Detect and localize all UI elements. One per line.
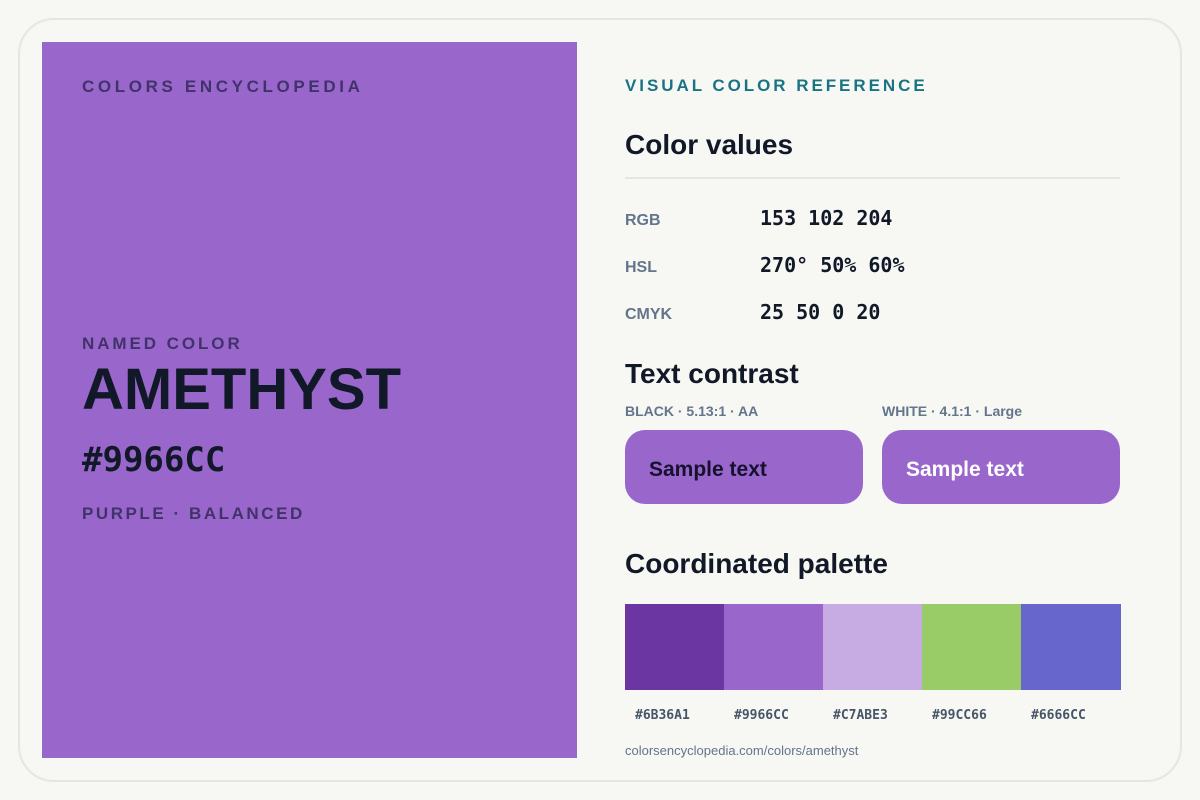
CMYK row: [625, 300, 880, 324]
palette hex labels: #6666CC: [1031, 708, 1086, 723]
HSL row: HSL: [625, 259, 657, 276]
RGB row: RGB: [625, 212, 661, 229]
section eyebrow: VISUAL COLOR REFERENCE: [625, 76, 928, 95]
white text sample: Sample text: [906, 458, 1024, 481]
palette hex labels: #9966CC: [734, 708, 789, 723]
palette hex labels: #99CC66: [932, 708, 987, 723]
black text sample: Sample text: [649, 458, 767, 481]
white contrast label: WHITE · 4.1:1 · Large: [882, 403, 1022, 419]
heading: coordinated palette: Coordinated palette: [625, 548, 888, 579]
brand label: COLORS ENCYCLOPEDIA: [82, 77, 364, 96]
HSL row: 270° 50% 60%: [760, 253, 904, 277]
CMYK row: 25 50 0 20: [760, 300, 880, 324]
color name title: AMETHYST: [82, 357, 401, 422]
palette swatches: [625, 604, 1121, 690]
black text sample: [625, 430, 863, 504]
heading: color values: Color values: [625, 129, 793, 160]
RGB row: [625, 206, 892, 230]
white text sample: [882, 430, 1120, 504]
RGB row: 153 102 204: [760, 206, 892, 230]
palette hex labels: [635, 708, 1086, 723]
CMYK row: CMYK: [625, 306, 672, 323]
panel: color swatch: [42, 42, 577, 758]
palette hex labels: #6B36A1: [635, 708, 690, 723]
HSL row: [625, 253, 904, 277]
color family label: PURPLE · BALANCED: [82, 504, 305, 523]
source url: colorsencyclopedia.com/colors/amethyst: [625, 743, 858, 758]
palette hex labels: #C7ABE3: [833, 708, 888, 723]
named color label: NAMED COLOR: [82, 334, 243, 353]
black contrast label: BLACK · 5.13:1 · AA: [625, 403, 758, 419]
values divider: [625, 177, 1120, 179]
heading: text contrast: Text contrast: [625, 358, 799, 389]
hex code: #9966CC: [82, 440, 225, 480]
